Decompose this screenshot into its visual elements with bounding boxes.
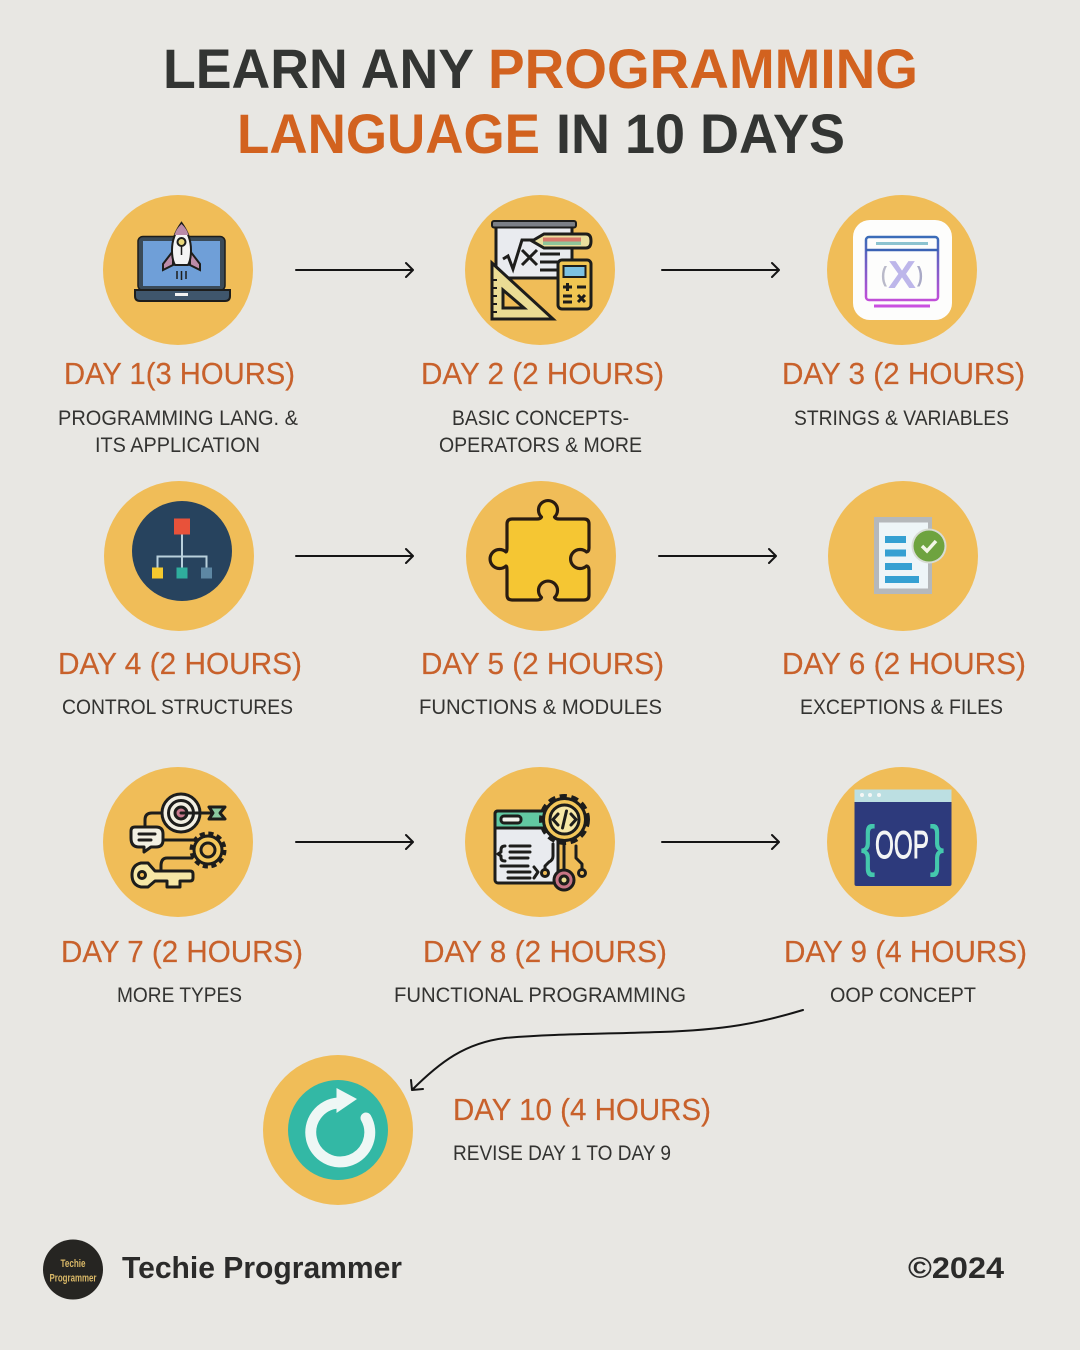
heading: day 4: DAY 4 (2 HOURS) bbox=[58, 646, 302, 681]
arrow: day 8 to 9 bbox=[662, 835, 779, 849]
icon: variable window: ( bbox=[881, 262, 888, 287]
icon: OOP window bbox=[854, 790, 952, 886]
icon: math board and calculator bbox=[492, 221, 591, 319]
arrow: day 5 to 6 bbox=[659, 549, 776, 563]
description: day 8: FUNCTIONAL PROGRAMMING bbox=[394, 984, 686, 1007]
description: day 4: CONTROL STRUCTURES bbox=[62, 696, 293, 719]
panel: day 8 bbox=[394, 767, 686, 1007]
heading: day 7: DAY 7 (2 HOURS) bbox=[61, 934, 303, 969]
panel: day 5 bbox=[419, 481, 664, 719]
description: day 1: PROGRAMMING LANG. & bbox=[58, 407, 298, 430]
icon: flow hierarchy bbox=[132, 501, 232, 601]
heading: day 2: DAY 2 (2 HOURS) bbox=[421, 356, 664, 391]
heading: day 10: DAY 10 (4 HOURS) bbox=[453, 1092, 711, 1127]
footer logo: Programmer bbox=[50, 1272, 97, 1284]
arrow: day 4 to 5 bbox=[296, 549, 413, 563]
icon: OOP window: { bbox=[861, 814, 875, 877]
panel: day 1 bbox=[58, 195, 298, 457]
arrow: day 9 to 10 bbox=[411, 1010, 803, 1090]
panel: day 3 bbox=[782, 195, 1025, 430]
description: day 2: BASIC CONCEPTS- bbox=[452, 407, 629, 430]
heading: day 1: DAY 1(3 HOURS) bbox=[64, 356, 295, 391]
icon: variable window: ) bbox=[917, 262, 923, 287]
panel: day 7 bbox=[61, 767, 303, 1007]
panel: day 9 bbox=[784, 767, 1027, 1007]
title bbox=[163, 37, 918, 165]
description: day 3: STRINGS & VARIABLES bbox=[794, 407, 1009, 430]
arrow: day 7 to 8 bbox=[296, 835, 413, 849]
icon: code window and gear bbox=[495, 796, 588, 890]
title: LANGUAGE bbox=[237, 102, 540, 165]
icon: OOP window: } bbox=[930, 814, 944, 877]
footer logo: Techie bbox=[60, 1258, 86, 1270]
icon: refresh bbox=[288, 1080, 388, 1180]
panel: day 6 bbox=[782, 481, 1026, 719]
heading: day 3: DAY 3 (2 HOURS) bbox=[782, 356, 1025, 391]
icon: checklist document bbox=[874, 517, 946, 594]
panel: day 10 bbox=[263, 1055, 711, 1205]
description: day 1 bbox=[58, 407, 298, 457]
heading: day 8: DAY 8 (2 HOURS) bbox=[423, 934, 667, 969]
icon: variable window bbox=[853, 220, 952, 320]
arrow: day 1 to 2 bbox=[296, 263, 413, 277]
icon: OOP window: OOP bbox=[875, 824, 929, 867]
icon: target, gear and key bbox=[131, 794, 225, 887]
arrow: day 2 to 3 bbox=[662, 263, 779, 277]
icon: variable window: X bbox=[888, 254, 916, 297]
copyright: ©2024 bbox=[908, 1252, 1004, 1285]
icon: puzzle piece bbox=[490, 501, 589, 600]
heading: day 6: DAY 6 (2 HOURS) bbox=[782, 646, 1026, 681]
description: day 7: MORE TYPES bbox=[117, 984, 242, 1007]
description: day 2 bbox=[439, 407, 642, 457]
description: day 6: EXCEPTIONS & FILES bbox=[800, 696, 1003, 719]
description: day 2: OPERATORS & MORE bbox=[439, 434, 642, 457]
panel: day 4 bbox=[58, 481, 302, 719]
footer logo bbox=[43, 1240, 103, 1300]
heading: day 9: DAY 9 (4 HOURS) bbox=[784, 934, 1027, 969]
panel: day 2 bbox=[421, 195, 664, 457]
description: day 1: ITS APPLICATION bbox=[95, 434, 260, 457]
title: IN 10 DAYS bbox=[556, 102, 845, 165]
heading: day 5: DAY 5 (2 HOURS) bbox=[421, 646, 664, 681]
description: day 10: REVISE DAY 1 TO DAY 9 bbox=[453, 1142, 671, 1165]
description: day 5: FUNCTIONS & MODULES bbox=[419, 696, 662, 719]
title: PROGRAMMING bbox=[488, 37, 918, 100]
icon: laptop with rocket bbox=[135, 223, 230, 301]
title: LEARN ANY bbox=[163, 37, 474, 100]
brand name: Techie Programmer bbox=[122, 1250, 402, 1285]
description: day 9: OOP CONCEPT bbox=[830, 984, 976, 1007]
